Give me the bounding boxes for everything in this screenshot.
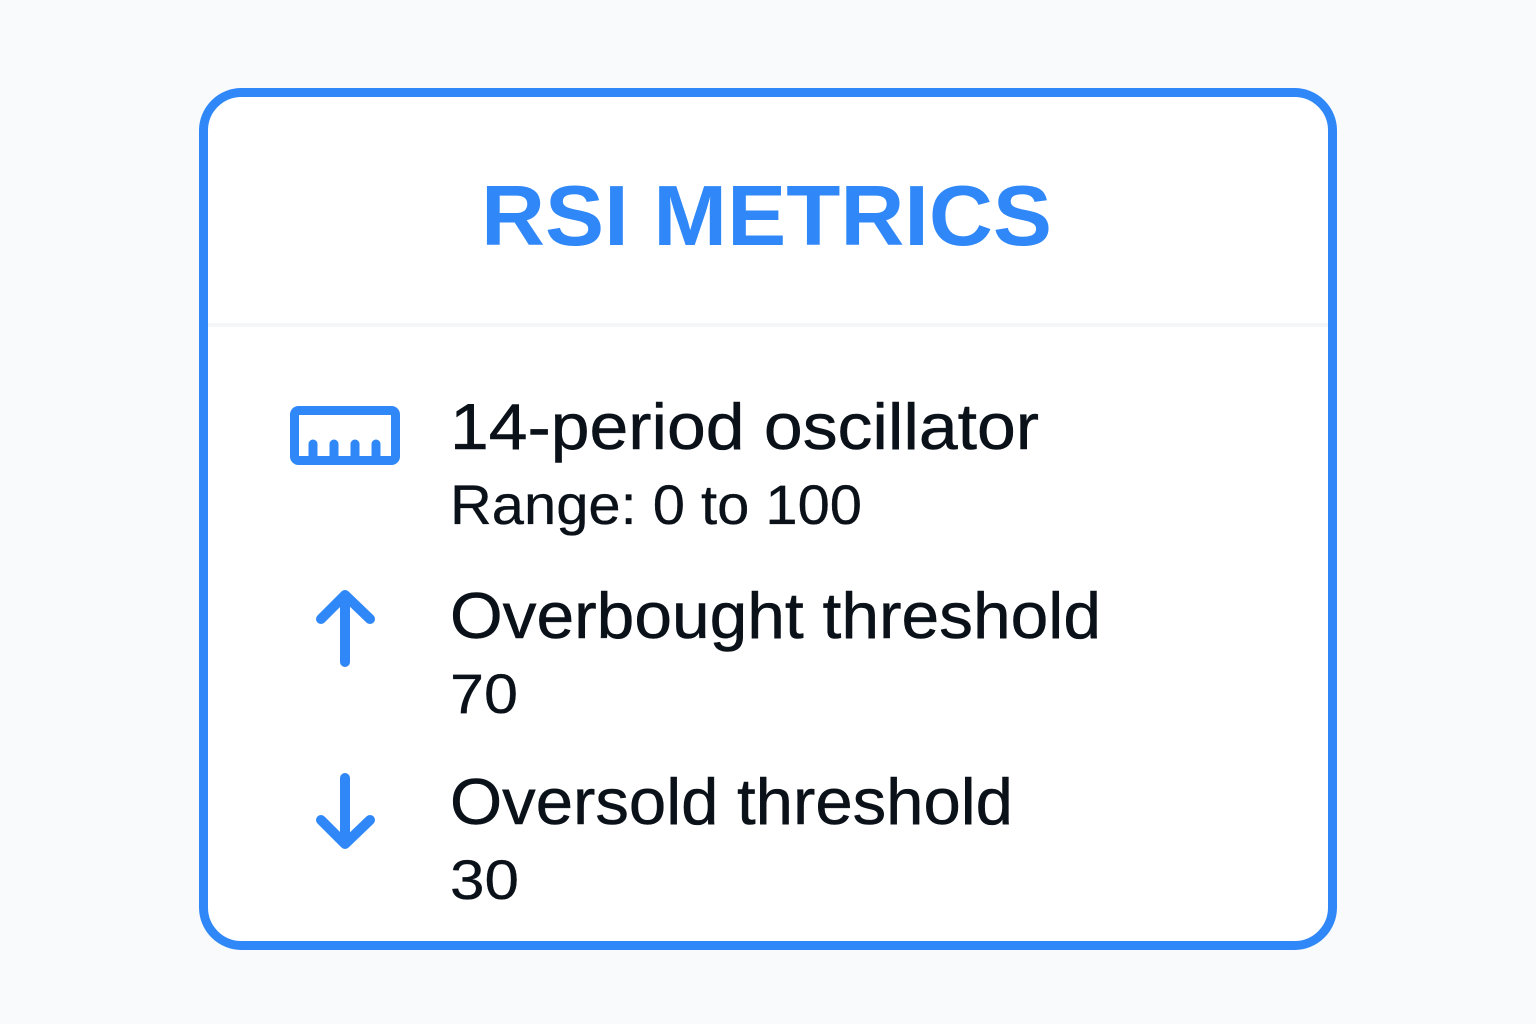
text block: oversold threshold: 30	[450, 848, 519, 911]
text block: 14-period oscillator: 14-period oscillator	[450, 390, 1039, 463]
text block: 14-period oscillator	[450, 390, 1039, 536]
text block: oversold threshold	[450, 765, 1013, 911]
title: RSI METRICS	[481, 169, 1052, 264]
text block: 14-period oscillator: Range: 0 to 100	[450, 473, 862, 536]
text block: oversold threshold: Oversold threshold	[450, 765, 1013, 838]
icon: ruler	[294, 410, 396, 460]
icon: down arrow	[321, 778, 370, 844]
panel: RSI metrics card	[204, 92, 1332, 946]
icon: up arrow	[321, 595, 370, 662]
text block: overbought threshold	[450, 579, 1101, 725]
text block: overbought threshold: 70	[450, 662, 518, 725]
text block: overbought threshold: Overbought threshold	[450, 579, 1101, 652]
